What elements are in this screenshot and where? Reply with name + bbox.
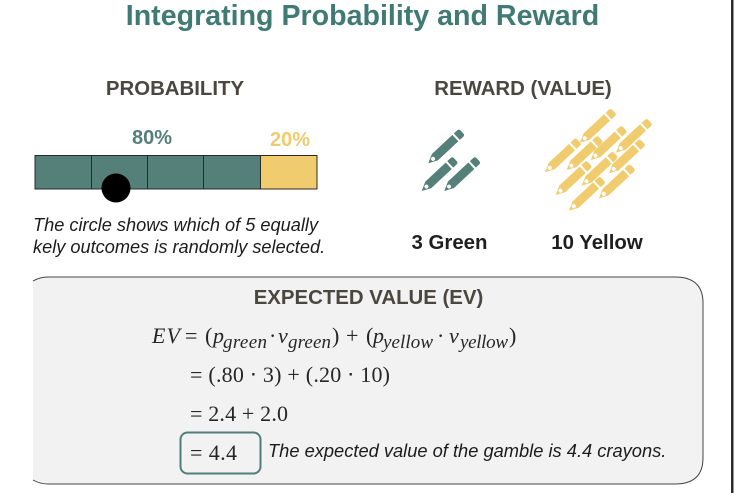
heading: reward: REWARD (VALUE) <box>434 78 612 100</box>
probability bar <box>35 156 317 189</box>
formula line 1: EV <box>151 323 183 348</box>
icon: 10 yellow crayons <box>542 108 653 214</box>
selection circle <box>102 174 130 202</box>
formula line 1: ) <box>509 323 516 348</box>
icon: 3 green crayons <box>419 129 481 194</box>
probability caption: The circle shows which of 5 equally <box>33 215 320 235</box>
formula line 1: ) <box>332 323 339 348</box>
result box: = 4.4 <box>190 440 237 465</box>
formula line 1: yellow <box>458 332 508 353</box>
label: 3 green: 3 Green <box>412 232 487 254</box>
formula line 1: v <box>449 323 459 348</box>
panel: expected value <box>33 277 703 484</box>
heading: probability: PROBABILITY <box>106 78 244 100</box>
result box <box>180 432 260 474</box>
page right border <box>731 0 734 493</box>
formula line 1: + <box>346 323 358 348</box>
formula line 1: = <box>185 323 197 348</box>
formula line 1: · <box>437 323 444 348</box>
formula line 3: = 2.4 + 2.0 <box>190 401 288 426</box>
formula line 1: green <box>223 332 267 353</box>
probability caption: kely outcomes is randomly selected. <box>33 237 325 257</box>
probability caption <box>33 215 325 257</box>
label: 20%: 20% <box>270 129 310 151</box>
label: 10 yellow: 10 Yellow <box>551 232 643 254</box>
label: 80%: 80% <box>132 127 172 149</box>
formula line 1: p <box>371 323 384 348</box>
formula line 1: yellow <box>381 332 433 353</box>
formula line 1: p <box>211 323 224 348</box>
formula line 1: green <box>288 332 331 353</box>
formula line 1: ( <box>366 323 373 348</box>
formula line 1: · <box>269 323 276 348</box>
title: Integrating Probability and Reward <box>126 0 599 32</box>
formula line 1: v <box>278 323 288 348</box>
result caption: The expected value of the gamble is 4.4 crayons. <box>268 440 666 461</box>
formula line 2: = (.80 ⋅ 3) + (.20 ⋅ 10) <box>190 362 390 387</box>
heading: expected value: EXPECTED VALUE (EV) <box>254 287 483 309</box>
formula line 1: ( <box>205 323 212 348</box>
formula line 1 <box>151 323 516 353</box>
